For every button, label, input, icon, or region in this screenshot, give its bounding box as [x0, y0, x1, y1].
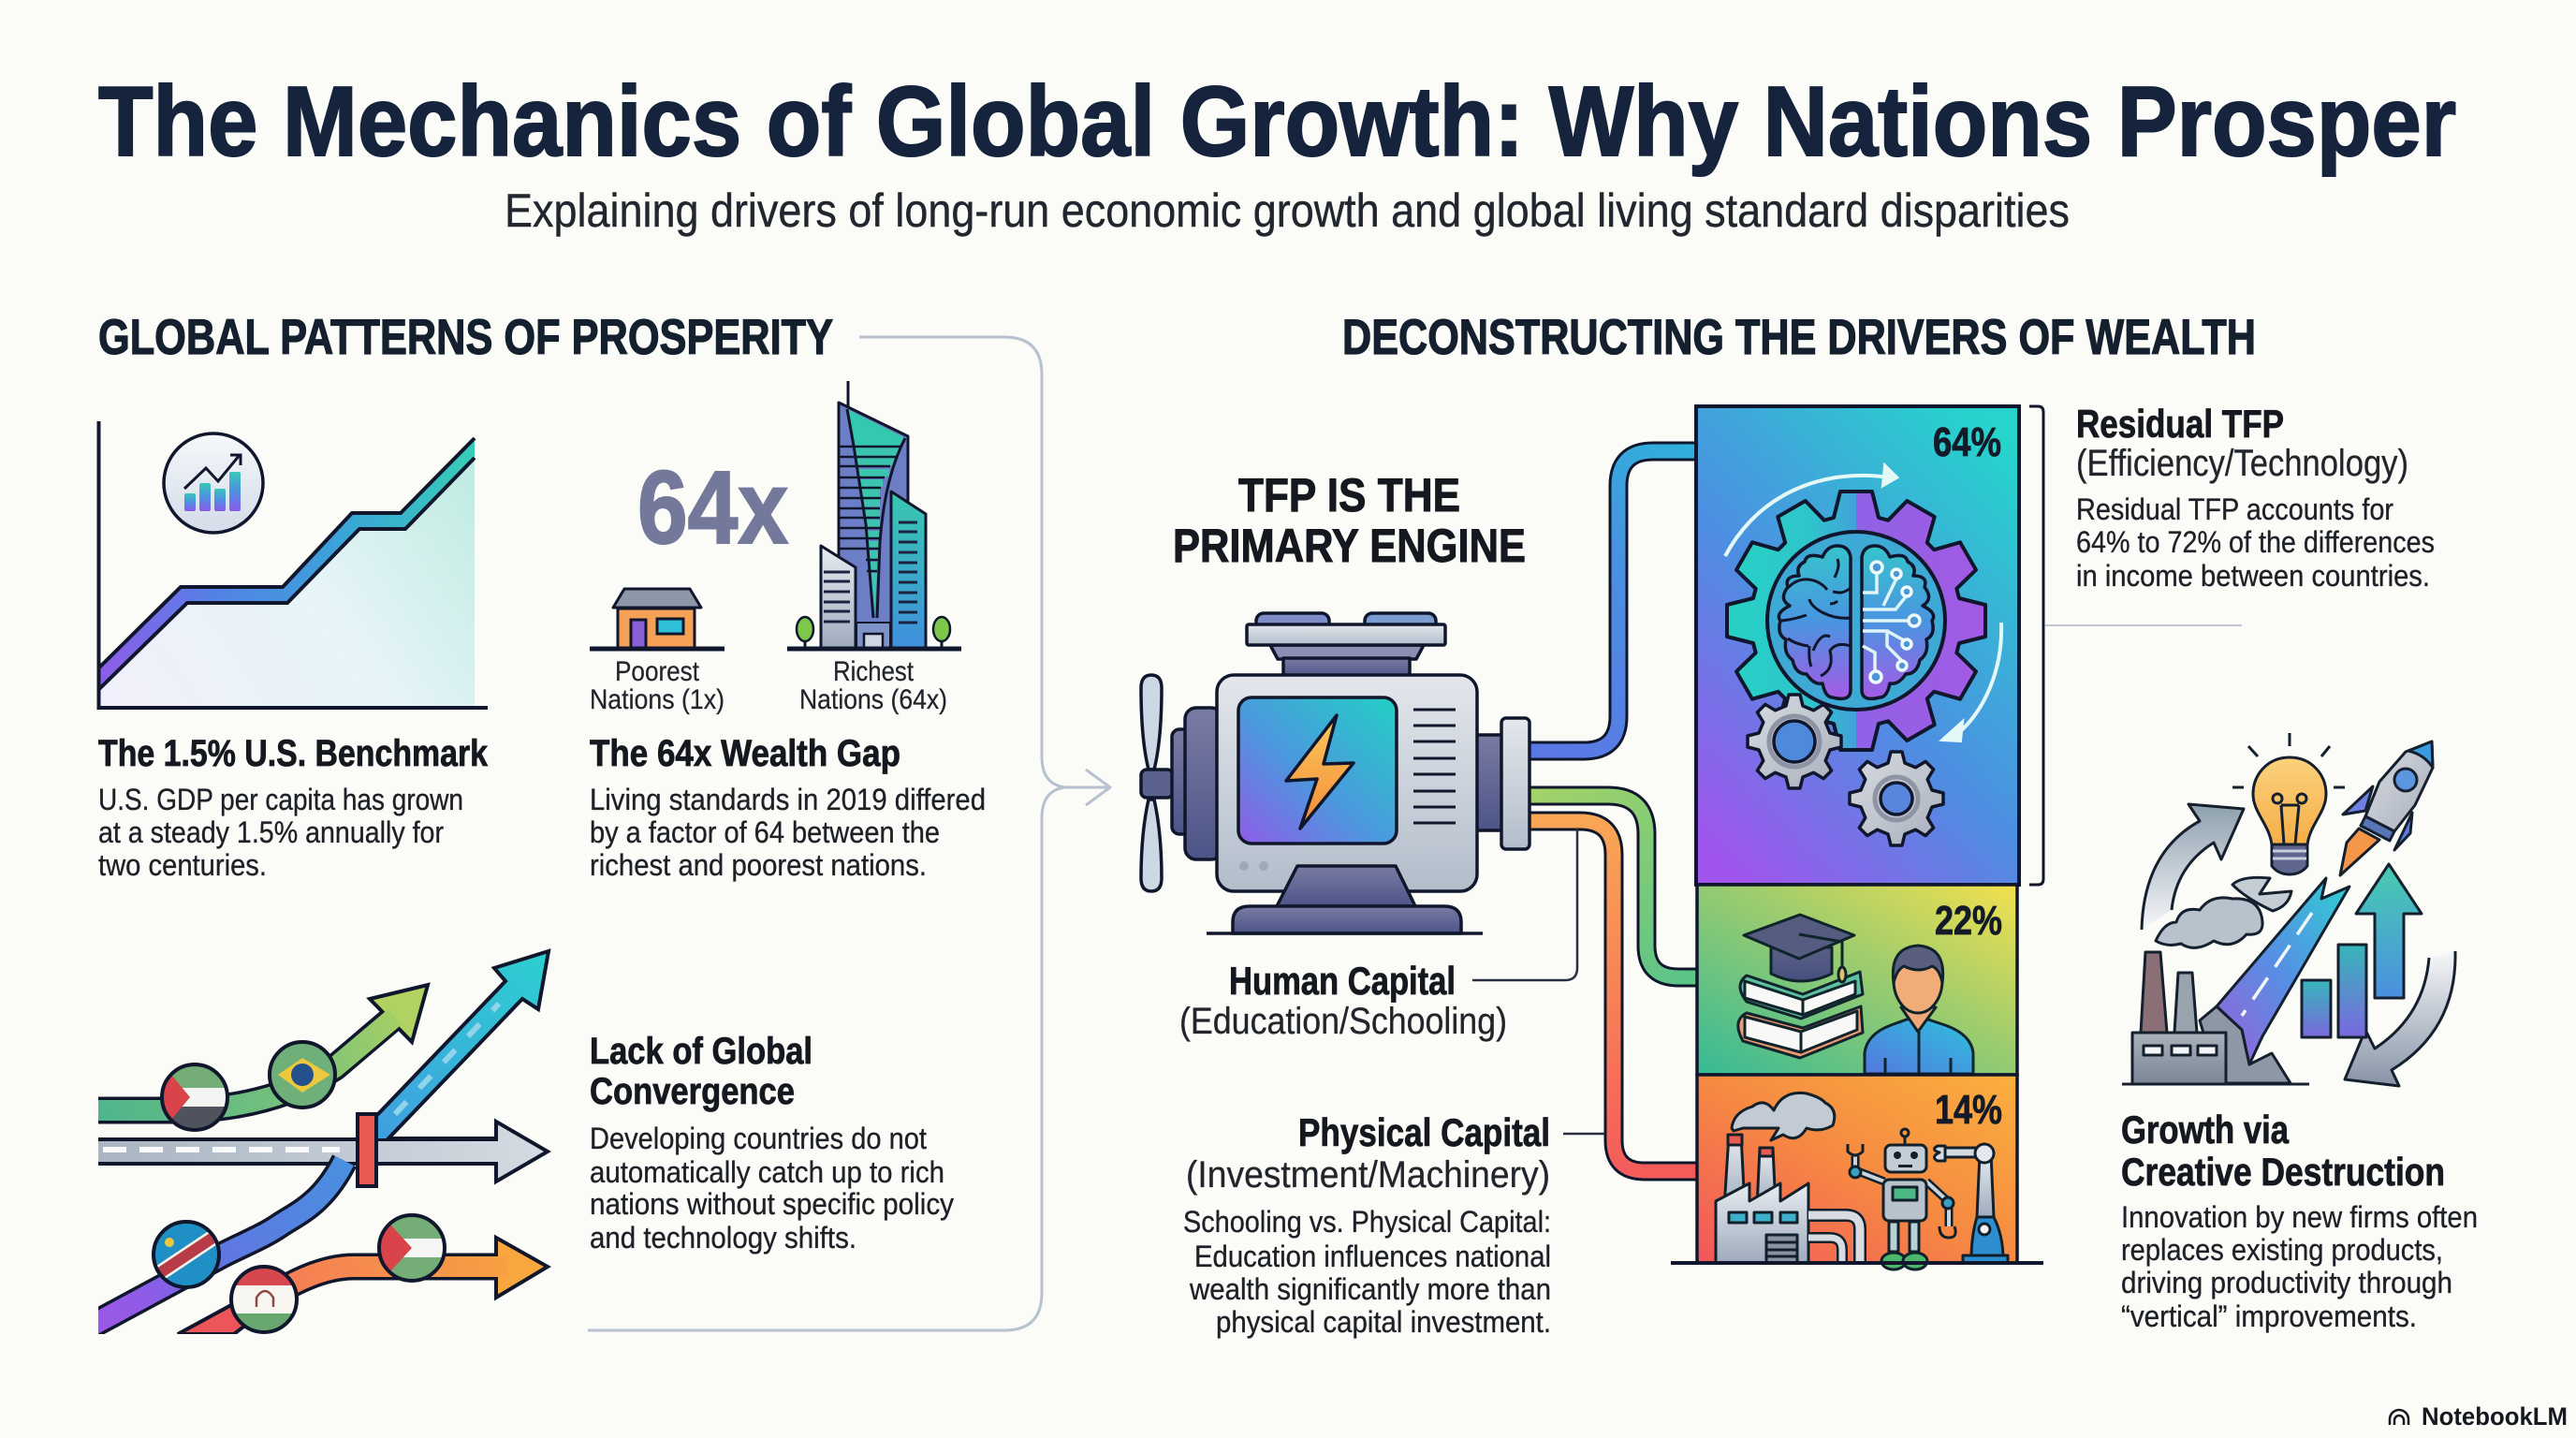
text: creative destruction: Innovation by new firms often — [2121, 1200, 2478, 1234]
arrow: teal rising road — [376, 951, 549, 1138]
panel: 22% human capital block — [1697, 885, 2017, 1075]
body text: U.S. GDP per capita has grown — [98, 783, 463, 816]
status dots — [1239, 861, 1268, 871]
icon: small gear right — [1850, 752, 1943, 845]
body text: Living standards in 2019 differed — [590, 783, 986, 816]
heading: Convergence — [590, 1071, 795, 1112]
label: richest: Nations (64x) — [799, 684, 947, 715]
icon: factory with smoke — [1716, 1093, 1860, 1263]
icon: large gear — [1727, 492, 1985, 750]
top assembly — [1247, 613, 1445, 677]
text: residual TFP: Residual TFP — [2076, 402, 2284, 446]
icon: rocket — [2340, 741, 2433, 875]
main body — [1217, 675, 1477, 891]
body text — [590, 1122, 954, 1255]
screen — [1238, 697, 1397, 844]
engine base — [1207, 866, 1483, 933]
heading: TFP primary engine: TFP IS THE — [1238, 469, 1460, 521]
icon: books and graduation cap — [1738, 915, 1863, 1058]
text: schooling vs physical capital: wealth significantly more than — [1189, 1272, 1551, 1306]
heading — [590, 1031, 812, 1112]
lightning bolt — [1286, 715, 1354, 829]
label: physical capital: (Investment/Machinery) — [1186, 1154, 1550, 1196]
chart: stepped growth line — [98, 421, 488, 708]
body text: two centuries. — [98, 848, 267, 882]
cloud — [2156, 877, 2291, 947]
icon: student — [1865, 946, 1973, 1074]
text: residual TFP — [2076, 402, 2435, 593]
text: creative destruction: “vertical” improvements. — [2121, 1299, 2417, 1333]
icon: flag 2 — [270, 1042, 335, 1108]
label: richest — [799, 656, 947, 715]
icon: flag 3 — [152, 1220, 221, 1289]
diagram: diverging roads with flags — [75, 951, 549, 1336]
body text: nations without specific policy — [590, 1187, 954, 1221]
text: residual TFP: in income between countries. — [2076, 559, 2430, 593]
body text: by a factor of 64 between the — [590, 815, 940, 849]
stack ground line — [1671, 1261, 2043, 1265]
vents — [1413, 710, 1456, 823]
label: poorest — [590, 656, 724, 715]
icon: small gear left — [1748, 695, 1841, 788]
text: residual TFP: 64% to 72% of the differences — [2076, 525, 2435, 559]
text: schooling vs physical capital — [1183, 1205, 1551, 1339]
label: human capital: Human Capital — [1229, 959, 1456, 1003]
icon: rotation arrows — [1725, 466, 2001, 741]
icon: flag 1 — [160, 1064, 227, 1131]
text: schooling vs physical capital: Education influences national — [1194, 1240, 1551, 1273]
icon: engine — [1141, 613, 1530, 933]
label: human capital — [1179, 829, 1577, 1042]
icon: bar chart badge — [164, 433, 263, 533]
icon: brain with circuit — [1778, 546, 1934, 698]
icon: light bulb — [2232, 733, 2345, 874]
heading: The 1.5% U.S. Benchmark — [98, 733, 489, 774]
pipes: engine to stack — [1526, 451, 1702, 1171]
text: creative destruction: driving productivity through — [2121, 1266, 2452, 1299]
arrow: orange road — [178, 1238, 548, 1334]
label: poorest: Poorest — [615, 656, 700, 687]
heading: global patterns: GLOBAL PATTERNS OF PROSPERITY — [98, 310, 833, 365]
bracket: residual TFP — [2029, 406, 2242, 885]
icon: robotic arm — [1934, 1144, 2008, 1263]
percentage: 64% — [1933, 419, 2001, 465]
road trail — [2217, 878, 2349, 1064]
growth bars and up arrow — [2302, 864, 2422, 1037]
text: creative destruction: replaces existing products, — [2121, 1233, 2443, 1267]
arrow: lower right arc — [2345, 951, 2455, 1086]
label: richest: Richest — [833, 656, 915, 687]
text: residual TFP: Residual TFP accounts for — [2076, 492, 2393, 526]
heading: deconstructing: DECONSTRUCTING THE DRIVERS OF WEALTH — [1342, 310, 2256, 365]
subtitle: Explaining drivers of long-run economic growth and global living standard disparities — [505, 184, 2070, 237]
body text: automatically catch up to rich — [590, 1155, 944, 1189]
text: residual TFP: (Efficiency/Technology) — [2076, 443, 2408, 484]
arrow: upper left arc — [2142, 804, 2244, 930]
label: human capital: (Education/Schooling) — [1179, 1001, 1507, 1042]
panel: lack of global convergence — [75, 951, 954, 1336]
panel: U.S. benchmark — [98, 421, 489, 882]
body text — [98, 783, 463, 882]
heading: TFP primary engine — [1173, 469, 1526, 572]
heading: TFP primary engine: PRIMARY ENGINE — [1173, 520, 1526, 572]
factory — [2122, 952, 2309, 1084]
logo: NotebookLM: NotebookLM — [2422, 1402, 2568, 1431]
label: poorest: Nations (1x) — [590, 684, 724, 715]
icon: flag 4 — [230, 1264, 301, 1336]
percentage: 14% — [1935, 1087, 2002, 1133]
arrow: grey main road — [98, 1122, 548, 1181]
fan blades — [1141, 675, 1173, 891]
body text: Developing countries do not — [590, 1122, 927, 1155]
big number: 64x — [637, 450, 788, 565]
icon: flag 5 — [379, 1213, 450, 1283]
text: creative destruction — [2121, 1108, 2478, 1333]
heading: Lack of Global — [590, 1031, 812, 1072]
panel: 14% physical capital block — [1697, 1075, 2017, 1269]
panel: 64x wealth gap — [590, 381, 986, 882]
rear housing — [1172, 708, 1222, 859]
arrow: bracket connecting left panel to right panel — [588, 337, 1110, 1330]
text: schooling vs physical capital: physical capital investment. — [1216, 1305, 1551, 1339]
road barrier — [358, 1114, 376, 1186]
icon: robot — [1848, 1129, 1955, 1269]
icon: creative destruction — [2122, 733, 2455, 1086]
icon: small house — [590, 589, 724, 649]
body text: and technology shifts. — [590, 1221, 856, 1255]
text: creative destruction: Growth via — [2121, 1108, 2290, 1152]
text: creative destruction: Creative Destruction — [2121, 1150, 2445, 1194]
percentage: 22% — [1935, 898, 2002, 944]
heading: The 64x Wealth Gap — [590, 733, 900, 774]
panel: 64% residual TFP block — [1696, 406, 2019, 885]
text: schooling vs physical capital: Schooling vs. Physical Capital: — [1183, 1205, 1551, 1239]
icon: skyscrapers — [787, 381, 961, 649]
arrow: green road — [94, 985, 428, 1110]
body text: richest and poorest nations. — [590, 848, 927, 882]
body text — [590, 783, 986, 882]
label: physical capital: Physical Capital — [1298, 1110, 1550, 1154]
label: physical capital — [1186, 1110, 1604, 1196]
right shaft and flange — [1475, 718, 1530, 849]
body text: at a steady 1.5% annually for — [98, 815, 444, 849]
arrow: blue-purple rising road — [75, 1161, 344, 1335]
